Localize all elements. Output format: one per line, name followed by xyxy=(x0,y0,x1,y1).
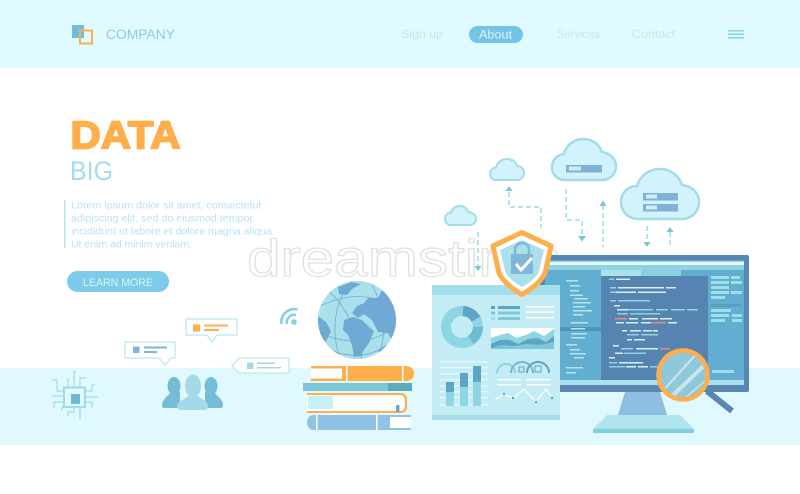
title: DATA: DATA xyxy=(70,114,180,158)
body text block: incididunt ut labore et dolore magna aliqua. xyxy=(71,226,275,238)
data flow arrows xyxy=(474,186,674,271)
legend list xyxy=(491,306,554,320)
learn more button: LEARN MORE xyxy=(83,277,153,289)
book 4 xyxy=(307,415,411,430)
header bar xyxy=(0,0,800,68)
navigation: services: Services xyxy=(557,29,600,41)
body text block: adipiscing elit, sed do eiusmod tempor xyxy=(71,214,254,224)
gauge arcs xyxy=(497,362,549,373)
security shield xyxy=(493,232,551,294)
cloud with one server xyxy=(552,139,616,180)
magnifying glass xyxy=(658,350,732,411)
cloud small middle xyxy=(490,159,524,180)
navigation: about button: About xyxy=(479,30,513,42)
footer band xyxy=(0,368,800,445)
line chart xyxy=(495,389,553,403)
dashboard panel xyxy=(432,285,560,420)
logo icon xyxy=(72,25,92,44)
cloud with two servers xyxy=(621,169,699,219)
stack of books xyxy=(303,366,414,430)
right properties panel xyxy=(711,276,742,373)
code editor xyxy=(601,276,708,380)
body text block: Ut enim ad minim veniam. xyxy=(71,240,192,250)
monitor xyxy=(540,255,749,433)
book 3 xyxy=(307,393,407,413)
speech bubble 1 xyxy=(125,342,175,365)
status bar xyxy=(545,380,744,385)
icon: people group xyxy=(162,374,223,410)
navigation: contact: Contact xyxy=(632,29,676,41)
icon: processor chip xyxy=(52,372,98,419)
bar chart xyxy=(440,361,488,406)
cloud small left xyxy=(445,206,476,225)
navigation: sign up: Sign up xyxy=(401,29,443,41)
donut chart xyxy=(446,311,478,343)
area chart xyxy=(491,328,554,349)
monitor stand xyxy=(593,392,694,433)
body text block xyxy=(64,200,275,250)
white text lines xyxy=(497,379,551,386)
subtitle: BIG: BIG xyxy=(70,156,113,186)
company name: COMPANY xyxy=(106,27,175,42)
globe xyxy=(317,281,398,362)
speech bubble 2 xyxy=(186,319,237,342)
speech bubble 3 xyxy=(232,358,289,373)
book 1 xyxy=(311,366,414,381)
watermark: dreamstime xyxy=(247,230,562,288)
body text block: Lorem ipsum dolor sit amet, consectetur xyxy=(71,200,263,212)
icon: wifi signal xyxy=(281,309,298,325)
learn more button xyxy=(67,271,169,292)
icon: hamburger menu xyxy=(728,30,744,38)
sidebar file tree xyxy=(560,280,601,374)
monitor screen xyxy=(545,260,744,385)
navigation: about button xyxy=(469,26,523,43)
book 2 xyxy=(303,383,412,391)
monitor frame xyxy=(540,255,749,392)
